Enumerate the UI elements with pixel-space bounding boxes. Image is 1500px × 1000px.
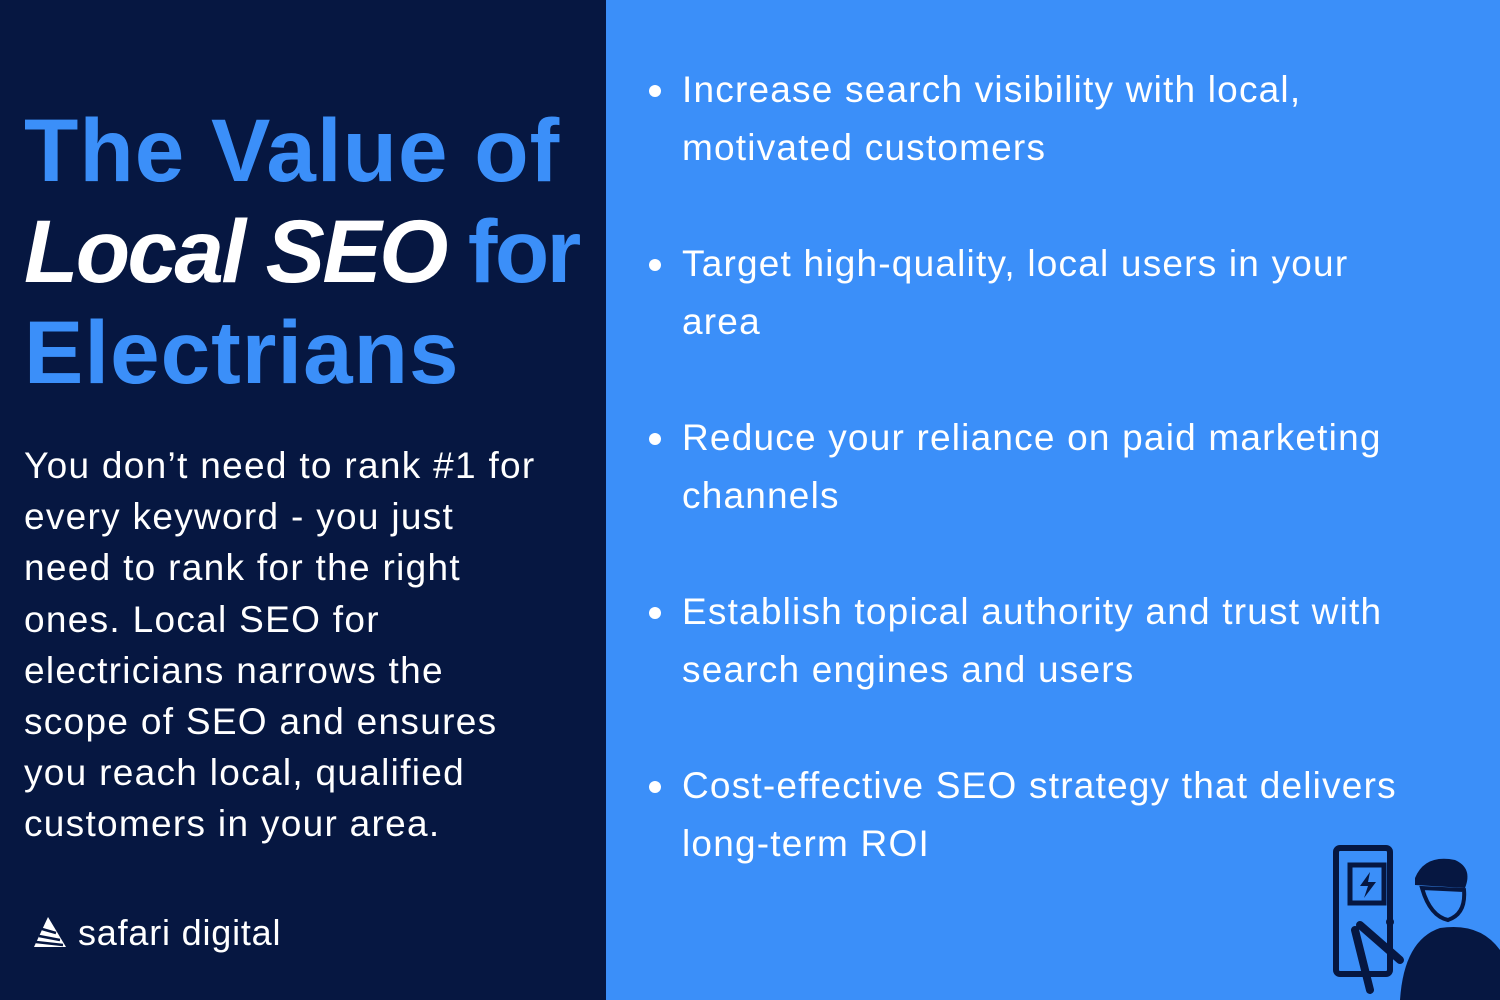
bullet 3: channels	[682, 475, 840, 516]
text block: intro: customers in your area.	[24, 803, 441, 844]
panel: left	[0, 0, 606, 1000]
title: The Value of	[24, 100, 560, 200]
bullet 3	[682, 409, 1482, 525]
icon: electrician	[1333, 845, 1500, 1000]
bullet 2	[682, 235, 1482, 351]
bullet 3: Reduce your reliance on paid marketing	[682, 417, 1382, 458]
text block: intro: electricians narrows the	[24, 650, 444, 691]
text block: intro: ones. Local SEO for	[24, 599, 380, 640]
bullet 4: search engines and users	[682, 649, 1135, 690]
text block: intro	[24, 445, 536, 844]
bullet 1	[682, 61, 1482, 177]
title: Local SEO for	[24, 201, 579, 301]
bullet 5	[682, 757, 1482, 873]
panel: right	[606, 0, 1500, 1000]
bullet 2: Target high-quality, local users in your	[682, 243, 1348, 284]
text block: intro: need to rank for the right	[24, 547, 461, 588]
bullet 2: area	[682, 301, 761, 342]
bullet 1: motivated customers	[682, 127, 1046, 168]
text block: intro: scope of SEO and ensures	[24, 701, 497, 742]
text block: intro: you reach local, qualified	[24, 752, 465, 793]
title: Electrians	[24, 302, 459, 402]
bullet 5: long-term ROI	[682, 823, 930, 864]
logo: safari digital: safari digital	[78, 912, 281, 953]
bullet 4	[682, 583, 1482, 699]
bullet 1: Increase search visibility with local,	[682, 69, 1301, 110]
bullet 5: Cost-effective SEO strategy that delivers	[682, 765, 1397, 806]
text block: intro: every keyword - you just	[24, 496, 454, 537]
text block: intro: You don’t need to rank #1 for	[24, 445, 536, 486]
title	[24, 100, 580, 402]
bullet 4: Establish topical authority and trust with	[682, 591, 1382, 632]
